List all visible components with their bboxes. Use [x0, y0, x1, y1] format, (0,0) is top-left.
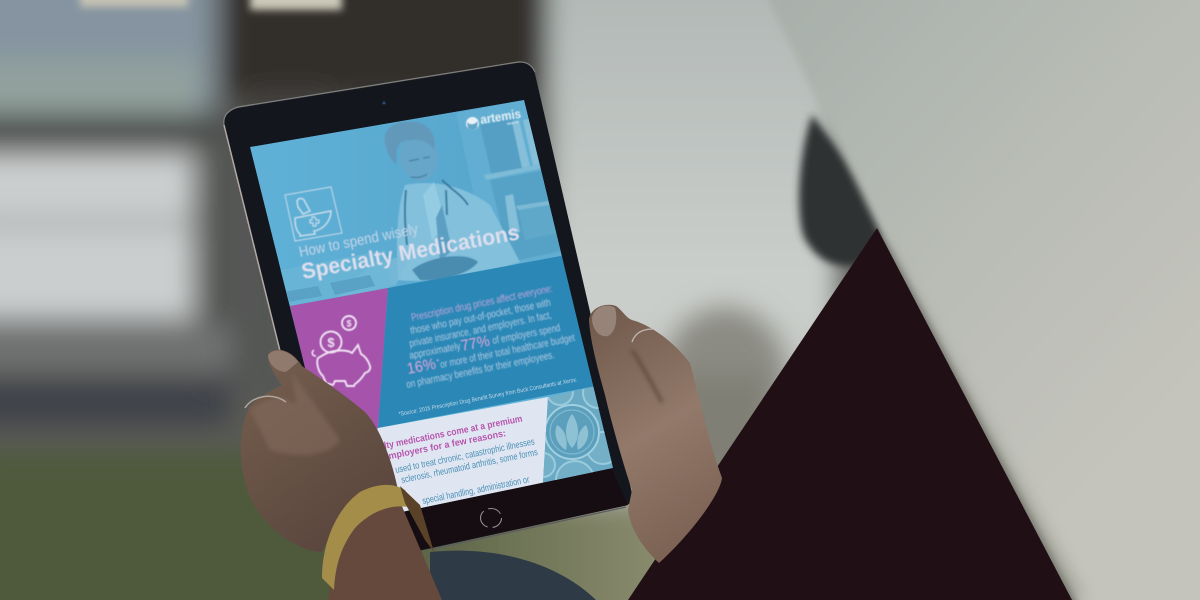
reasons text: used to treat chronic, catastrophic illnesses — [394, 436, 536, 476]
intro paragraph — [405, 283, 576, 391]
logo: HEALTH — [507, 120, 519, 126]
intro paragraph: approximately — [408, 340, 462, 362]
reasons text: for employers for a few reasons: — [368, 428, 507, 466]
screen — [250, 100, 620, 530]
intro paragraph: 77% — [460, 333, 491, 355]
gold watch band — [322, 485, 418, 590]
title: How to spend wisely — [297, 221, 420, 261]
purple panel — [290, 288, 388, 440]
intro paragraph: on pharmacy benefits for their employees. — [405, 349, 556, 391]
wrist — [328, 490, 442, 600]
bookshelf — [480, 118, 566, 262]
tablet body — [224, 63, 632, 567]
piggy bank icon: $ — [327, 335, 335, 350]
reasons text: special handling, administration or — [421, 474, 530, 507]
white panel — [378, 397, 548, 512]
mortar and pestle icon — [285, 187, 342, 241]
doctor — [384, 122, 520, 286]
intro paragraph: * — [436, 359, 440, 366]
dark blob — [799, 115, 885, 266]
camera — [382, 102, 386, 104]
piggy bank icon — [312, 316, 370, 386]
maroon garment — [628, 228, 1072, 600]
tablet — [224, 62, 632, 567]
logo: artemis — [479, 107, 522, 127]
reasons text: sclerosis, rheumatoid arthritis, some forms — [400, 447, 539, 486]
intro paragraph: 16% — [406, 356, 437, 378]
right hand — [589, 305, 722, 563]
intro paragraph: those who pay out-of-pocket, those with — [409, 297, 552, 337]
home button — [480, 508, 502, 528]
reasons text — [384, 416, 538, 506]
source note: *Source: 2015 Prescription Drug Benefit Survey from Buck Consultants at Xerox. — [398, 377, 578, 418]
intro paragraph: of employers spend — [491, 322, 561, 347]
logo — [466, 107, 522, 130]
left hand — [241, 350, 442, 600]
jeans — [430, 551, 596, 600]
pale foreground shape — [754, 0, 1200, 600]
intro paragraph: Prescription drug prices affect everyone: — [410, 283, 554, 324]
title: Specialty Medications — [299, 219, 521, 284]
intro paragraph: private insurance, and employers. In fact, — [408, 309, 553, 350]
reasons text: Specialty medications come at a premium — [356, 414, 523, 457]
pill image panel — [543, 386, 613, 483]
ring — [632, 329, 653, 342]
intro paragraph: or more of their total healthcare budget — [439, 332, 576, 371]
hero image — [250, 100, 570, 306]
blue text panel — [378, 255, 601, 428]
piggy bank icon: $ — [346, 318, 352, 328]
